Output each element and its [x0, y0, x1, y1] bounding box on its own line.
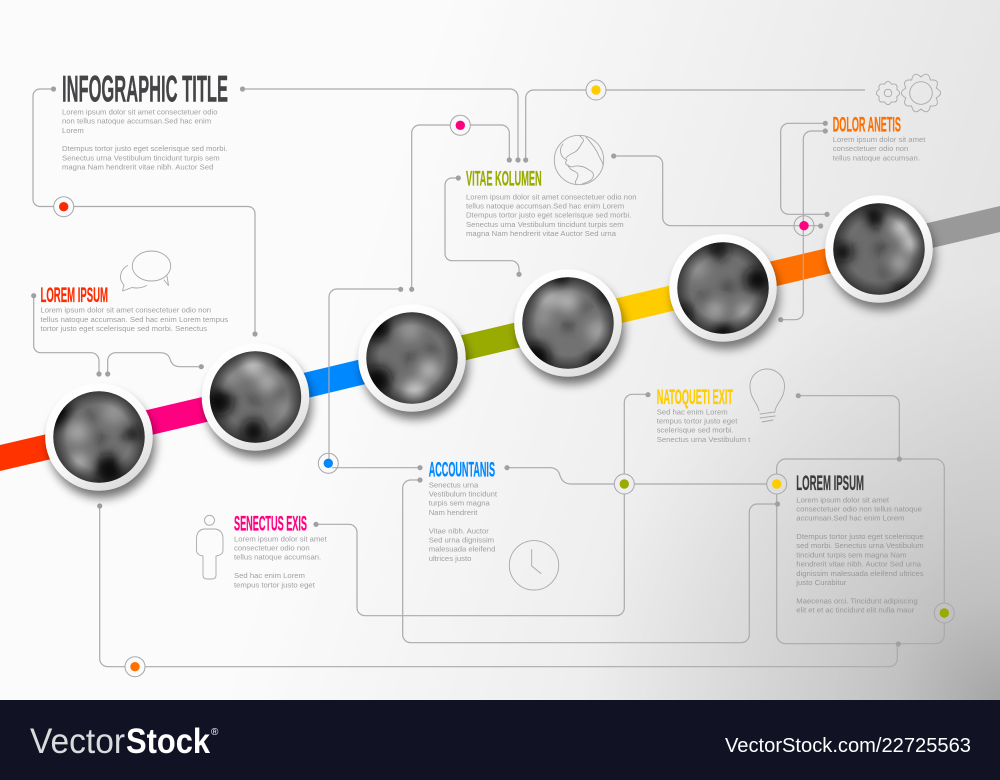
text: Maecenas orci. Tincidunt adipiscing	[796, 596, 918, 605]
photo circle 4	[514, 269, 624, 384]
icon: gears	[876, 74, 941, 112]
node: red	[54, 197, 74, 217]
block: lorem ipsum red: LOREM IPSUM	[40, 284, 108, 307]
text: accumsan.Sed hac enim Lorem	[796, 514, 904, 523]
text: tempus tortor justo eget	[657, 416, 738, 426]
timeline band	[0, 206, 1000, 471]
block: lorem ipsum dark	[795, 472, 924, 615]
title text: non tellus natoque accumsan.Sed hac enim	[62, 116, 211, 126]
footer logo: ®	[211, 727, 219, 738]
block: natoqueti exit	[657, 386, 751, 444]
connector lines	[33, 89, 944, 667]
text: consectetuer odio non	[833, 144, 908, 153]
photo circle 2	[202, 343, 312, 458]
title text: Lorem ipsum dolor sit amet consectetuer odio	[62, 107, 218, 116]
text: Vitae nibh. Auctor	[429, 526, 489, 535]
block: vitae kolumen: VITAE KOLUMEN	[466, 168, 542, 191]
photo circle 1	[43, 383, 155, 498]
text: Senectus urna Vestibulum t	[657, 435, 751, 444]
block: natoqueti exit: NATOQUETI EXIT	[657, 386, 733, 409]
text: tincidunt turpis sem magna Nam	[796, 550, 907, 559]
text: magna Nam hendrerit vitae Auctor Sed urna	[466, 229, 617, 238]
block: senectus exis: SENECTUS EXIS	[234, 513, 307, 536]
node: olive box	[934, 603, 954, 623]
text: consectetuer odio non	[234, 544, 310, 552]
text: tellus natoque accumsan.	[833, 153, 920, 162]
node: blue	[318, 453, 338, 473]
text: Senectus urna Vestibulum tincidunt turpis sem	[466, 220, 624, 229]
text: Sed hac enim Lorem	[234, 571, 305, 580]
block: dolor anetis	[833, 113, 926, 162]
text: elit et et ac tincidunt elit nulla maur	[796, 606, 915, 615]
photo circle 6	[825, 195, 935, 310]
text: tellus natoque accumsan.	[234, 553, 321, 562]
block: vitae kolumen	[466, 168, 636, 238]
text: Lorem ipsum dolor sit amet consectetuer odio non	[466, 192, 636, 201]
text: Dtempus tortor justo eget scelerisque	[796, 532, 924, 541]
text: sed morbi. Senectus urna Vestibulum	[796, 541, 924, 550]
block: senectus exis	[234, 513, 328, 589]
photo circle 3	[358, 304, 468, 419]
footer logo: Vector	[30, 722, 125, 761]
icon: person	[196, 515, 223, 579]
text: Lorem ipsum dolor sit amet consectetuer odio non	[40, 306, 211, 315]
text: ACCOUNTANIS	[429, 459, 495, 482]
title text: Dtempus tortor justo eget scelerisque sed morbi.	[62, 144, 227, 153]
title block	[62, 69, 228, 172]
title text: Lorem	[62, 126, 84, 135]
text: scelerisque sed morbi.	[657, 426, 734, 435]
text: tempus tortor justo eget	[234, 580, 316, 589]
node: yellow top	[586, 80, 606, 100]
footer url: VectorStock.com/22725563	[725, 735, 971, 757]
text: Lorem ipsum dolor sit amet	[234, 534, 328, 543]
node: magenta right	[794, 216, 814, 236]
block: accountanis	[429, 459, 498, 563]
block: lorem ipsum red	[40, 284, 228, 333]
photo circle 5	[669, 234, 779, 349]
icon: clock	[509, 541, 559, 590]
text: ultrices justo	[429, 554, 471, 563]
title text: Senectus urna Vestibulum tincidunt turpis sem	[62, 153, 220, 162]
text: tellus natoque accumsan.Sed hac enim Lorem	[466, 202, 624, 210]
text: malesuada eleifend	[429, 545, 495, 554]
text: tellus natoque accumsan. Sed hac enim Lorem tempus	[40, 315, 228, 324]
text: turpis sem magna	[429, 499, 491, 508]
node: green	[614, 474, 634, 494]
text: Senectus urna	[429, 480, 479, 489]
title text: magna Nam hendrerit vitae nibh. Auctor Sed	[62, 162, 213, 172]
block: lorem ipsum dark: LOREM IPSUM	[796, 472, 864, 495]
icon: globe	[554, 135, 604, 185]
footer logo	[30, 722, 219, 761]
text: Nam hendrerit	[429, 508, 478, 517]
block: dolor anetis: DOLOR ANETIS	[833, 113, 901, 136]
footer bar	[0, 700, 1000, 780]
text: justo Curabitur	[795, 578, 847, 587]
text: hendrerit vitae nibh. Auctor Sed urna	[796, 560, 922, 569]
text: tortor justo eget scelerisque sed morbi. Senectus	[40, 324, 207, 333]
node: magenta top	[450, 115, 470, 135]
text: Vestibulum tincidunt	[429, 490, 498, 498]
icon: light bulb	[750, 369, 784, 422]
node: orange bottom	[125, 657, 145, 677]
text: Lorem ipsum dolor sit amet	[796, 495, 890, 504]
text: Dtempus tortor justo eget scelerisque sed morbi.	[466, 211, 631, 220]
text: Sed urna dignissim	[429, 536, 494, 544]
text: consectetuer odio non tellus natoque	[796, 504, 922, 514]
connector end dots	[31, 86, 902, 647]
text: Sed hac enim Lorem	[657, 407, 728, 416]
node: yellow box	[767, 474, 787, 494]
text: INFOGRAPHIC TITLE	[62, 69, 228, 110]
text: Lorem ipsum dolor sit amet	[833, 135, 926, 144]
icon: chat bubbles	[120, 251, 171, 291]
footer logo: Stock	[126, 722, 210, 761]
text: dignissim malesuada eleifend ultrices	[796, 569, 924, 578]
